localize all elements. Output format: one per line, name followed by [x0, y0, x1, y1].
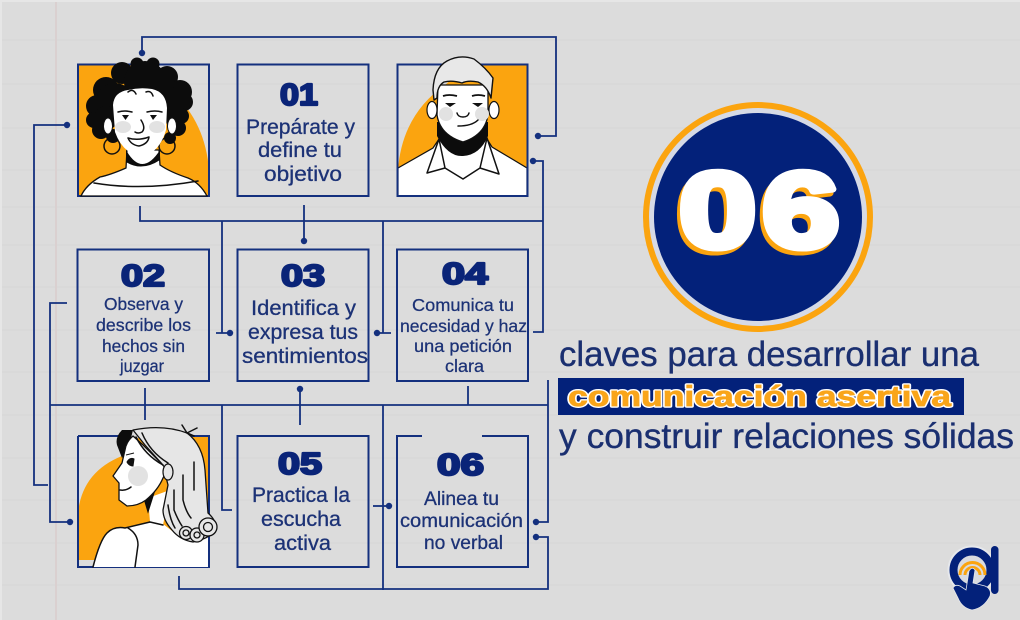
panel: step 02	[78, 250, 209, 381]
step number 06: 06	[437, 447, 484, 482]
heading: claves para desarrollar una comunicación asertiva y construir relaciones sólidas: y construir relaciones sólidas	[559, 417, 1014, 456]
panel: step 03	[238, 250, 368, 381]
heading: claves para desarrollar una comunicación asertiva y construir relaciones sólidas	[558, 335, 1014, 456]
step text 01: define tu	[258, 139, 342, 162]
panel: step 06	[397, 436, 528, 567]
step text 05: escucha	[261, 508, 341, 531]
panel: step 05	[238, 436, 368, 567]
step text 01	[246, 116, 355, 186]
badge: big number 06	[646, 105, 870, 329]
step text 06: Alinea tu	[424, 488, 499, 510]
step number 04: 04	[442, 256, 489, 291]
step text 05	[252, 484, 350, 555]
step text 06: no verbal	[424, 532, 503, 554]
panel: step 01	[238, 64, 368, 196]
step text 01: Prepárate y	[246, 116, 355, 139]
step text 01: objetivo	[264, 163, 342, 186]
step text 03: sentimientos	[242, 345, 368, 368]
badge: big number 06: 06	[676, 155, 837, 274]
step text 03	[242, 297, 368, 368]
heading: claves para desarrollar una comunicación asertiva y construir relaciones sólidas: comunicación asertiva	[568, 381, 952, 413]
step text 04	[400, 295, 527, 376]
step text 02	[96, 294, 191, 376]
avatar: woman with curly hair	[78, 58, 209, 196]
step text 02: juzgar	[119, 356, 164, 376]
icon: logo hand tapping	[948, 546, 998, 610]
step text 06	[400, 488, 523, 554]
heading: claves para desarrollar una comunicación asertiva y construir relaciones sólidas: claves para desarrollar una	[559, 335, 980, 374]
connector lines	[34, 37, 556, 590]
step text 05: Practica la	[252, 484, 350, 507]
step number 05: 05	[278, 446, 322, 481]
step text 04: necesidad y haz	[400, 316, 527, 336]
step number 01: 01	[280, 77, 318, 112]
heading: claves para desarrollar una comunicación asertiva y construir relaciones sólidas: comunicación asertiva	[568, 381, 952, 413]
badge: big number 06: 06	[679, 151, 840, 270]
step text 03: Identifica y	[251, 297, 357, 320]
step text 04: Comunica tu	[412, 295, 514, 315]
step text 02: hechos sin	[102, 336, 185, 356]
step text 04: una petición	[414, 336, 512, 356]
step text 02: describe los	[96, 315, 191, 335]
step text 06: comunicación	[400, 510, 523, 532]
avatar: man with grey hair	[398, 57, 528, 196]
step number 02: 02	[121, 258, 165, 293]
step number 03: 03	[281, 258, 325, 293]
step text 03: expresa tus	[248, 321, 358, 344]
step text 02: Observa y	[104, 294, 183, 314]
step text 05: activa	[274, 532, 331, 555]
avatar: woman in profile	[78, 425, 217, 567]
panel: step 04	[397, 250, 528, 381]
step text 04: clara	[445, 356, 484, 376]
